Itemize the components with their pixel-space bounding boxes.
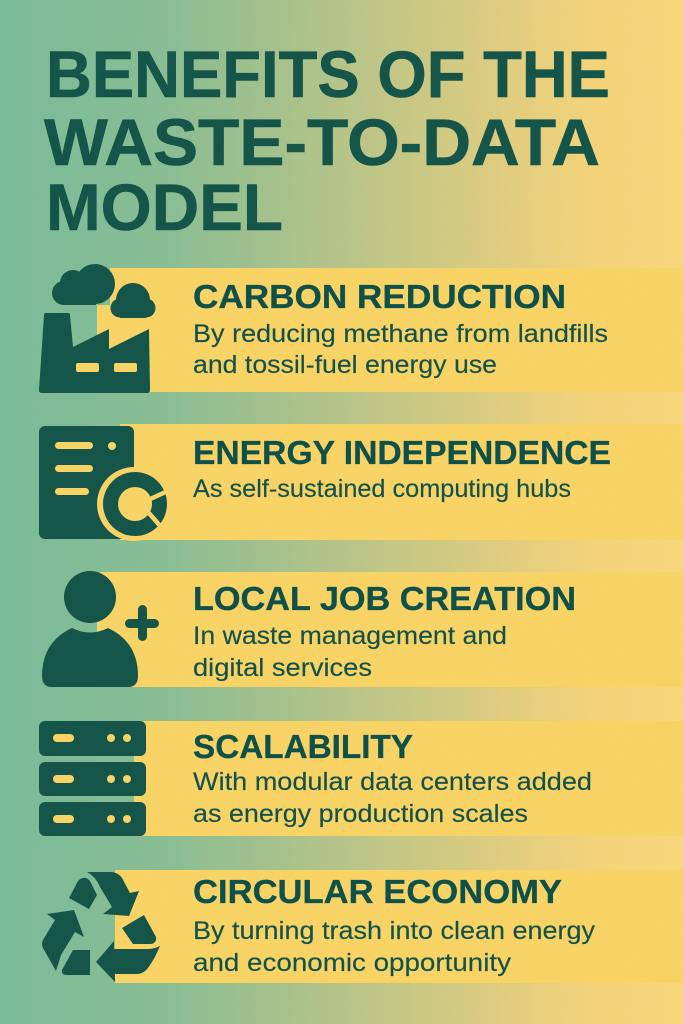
description: and economic opportunity (193, 949, 512, 977)
band (97, 572, 683, 687)
icon: recycle (42, 872, 160, 982)
band (97, 268, 683, 392)
title (44, 37, 610, 244)
description: By reducing methane from landfills (193, 320, 608, 348)
panel: energy independence (39, 424, 683, 541)
heading: ENERGY INDEPENDENCE (193, 434, 611, 471)
heading: CARBON REDUCTION (193, 278, 566, 315)
band (115, 870, 683, 983)
description: By turning trash into clean energy (193, 917, 596, 945)
description: In waste management and (193, 622, 507, 650)
description: With modular data centers added (193, 768, 592, 796)
title: BENEFITS OF THE (46, 37, 610, 111)
description: digital services (193, 654, 372, 682)
icon: factory with clouds (39, 264, 156, 393)
band (120, 424, 683, 540)
icon: server rack (39, 721, 146, 836)
heading: LOCAL JOB CREATION (193, 580, 576, 617)
icon: server with chart (39, 426, 171, 541)
description (193, 768, 592, 828)
title: WASTE-TO-DATA (44, 105, 600, 179)
panel: circular economy (42, 870, 683, 983)
panel: local job creation (42, 571, 683, 687)
heading: CIRCULAR ECONOMY (193, 873, 562, 910)
heading: SCALABILITY (193, 728, 413, 765)
description: as energy production scales (193, 800, 528, 828)
title: MODEL (46, 170, 283, 244)
description (193, 917, 596, 977)
band (134, 721, 683, 836)
panel: carbon reduction (39, 264, 683, 393)
icon: person with plus (42, 571, 159, 687)
description (193, 320, 608, 379)
description: and tossil-fuel energy use (193, 351, 497, 379)
panel: scalability (39, 721, 683, 836)
description: As self-sustained computing hubs (193, 475, 571, 503)
description (193, 622, 507, 682)
